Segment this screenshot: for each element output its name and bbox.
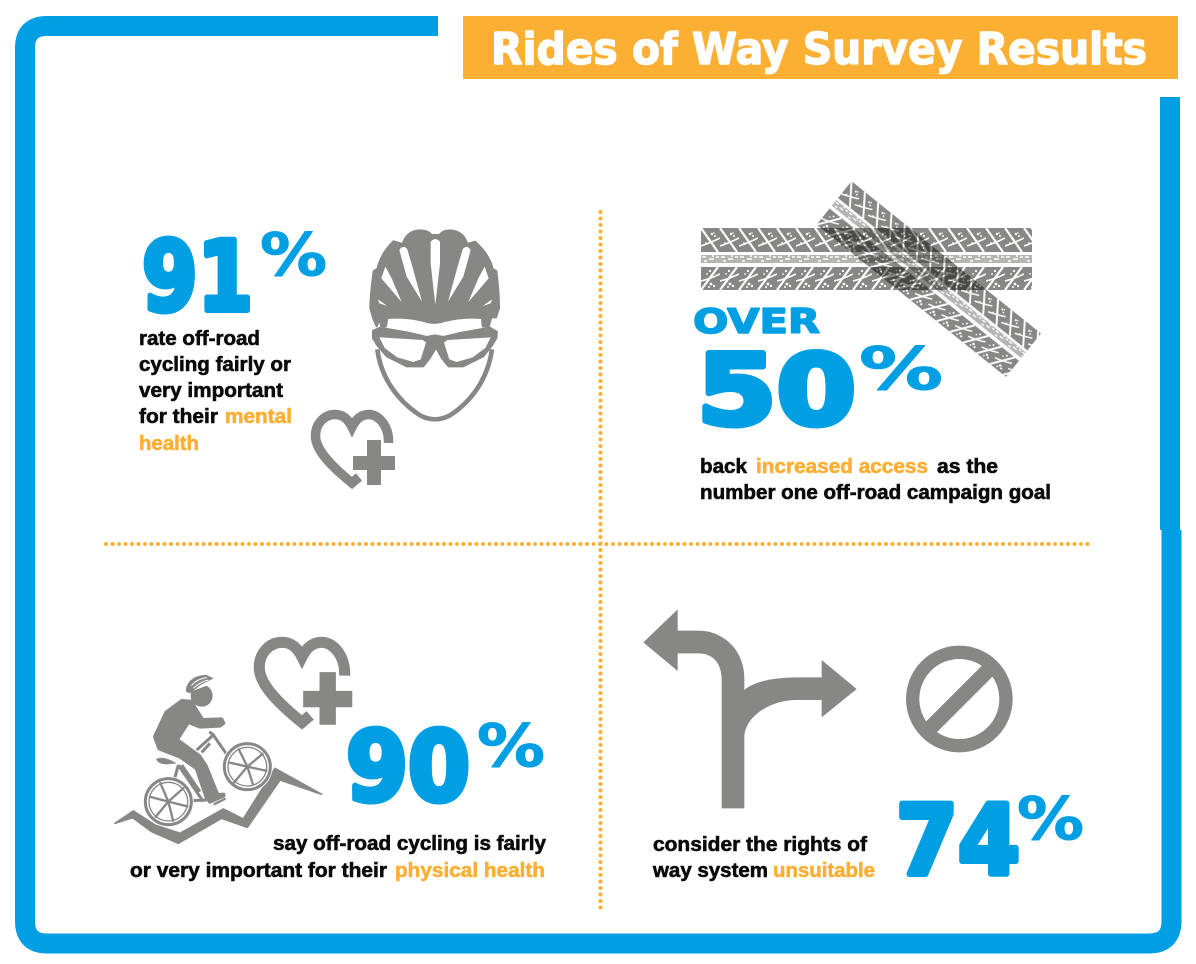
text: campaign goal caption: increased access xyxy=(756,456,928,478)
text: campaign goal caption xyxy=(700,456,1051,504)
icon: prohibited sign xyxy=(913,652,1006,746)
icon: forked road arrow xyxy=(643,609,857,808)
panel: campaign goal xyxy=(693,181,1051,504)
icon: mountain biker xyxy=(115,675,322,843)
panel: physical health xyxy=(115,642,547,882)
stat: over 50%: OVER xyxy=(693,302,820,342)
text: mental health caption: very important xyxy=(139,380,283,402)
text: mental health caption: health xyxy=(139,433,199,455)
text: campaign goal caption: number one off-road campaign goal xyxy=(700,482,1051,504)
text: campaign goal caption: back xyxy=(700,456,748,478)
panel: mental health xyxy=(139,220,499,485)
text: campaign goal caption: as the xyxy=(937,456,998,478)
text: physical health caption: say off-road cycling is fairly xyxy=(273,833,547,855)
text: mental health caption: mental xyxy=(225,406,292,428)
icon: cyclist head with helmet and glasses xyxy=(370,230,499,419)
text: physical health caption: or very important for their xyxy=(130,860,387,882)
icon: tyre tracks xyxy=(701,181,1041,377)
stat: 90%: 90 xyxy=(346,711,470,823)
text: mental health caption: cycling fairly or xyxy=(139,354,291,376)
text: rights of way caption: unsuitable xyxy=(773,860,875,882)
dotted dividers xyxy=(106,212,1090,910)
icon: heart with plus xyxy=(259,642,352,725)
stat: over 50%: % xyxy=(859,334,943,403)
stat: 90%: % xyxy=(477,711,545,780)
text: physical health caption: physical health xyxy=(395,860,545,882)
text: physical health caption xyxy=(130,833,547,882)
title banner: Rides of Way Survey Results xyxy=(491,24,1147,75)
text: rights of way caption xyxy=(652,834,875,882)
text: rights of way caption: way system xyxy=(652,860,768,882)
text: mental health caption xyxy=(139,328,292,455)
stat: 74%: % xyxy=(1017,784,1084,853)
text: mental health caption: rate off-road xyxy=(139,328,260,350)
stat: 90% xyxy=(346,711,545,823)
stat: 74%: 74 xyxy=(896,785,1020,897)
icon: heart with plus xyxy=(316,414,395,485)
stat: over 50%: 50 xyxy=(697,334,856,447)
stat: 91%: 91 xyxy=(142,221,253,333)
text: rights of way caption: consider the rights of xyxy=(653,834,867,856)
stat: 91%: % xyxy=(260,220,327,289)
panel: rights of way xyxy=(643,609,1084,897)
stat: over 50% xyxy=(693,302,943,447)
text: mental health caption: for their xyxy=(139,406,218,428)
